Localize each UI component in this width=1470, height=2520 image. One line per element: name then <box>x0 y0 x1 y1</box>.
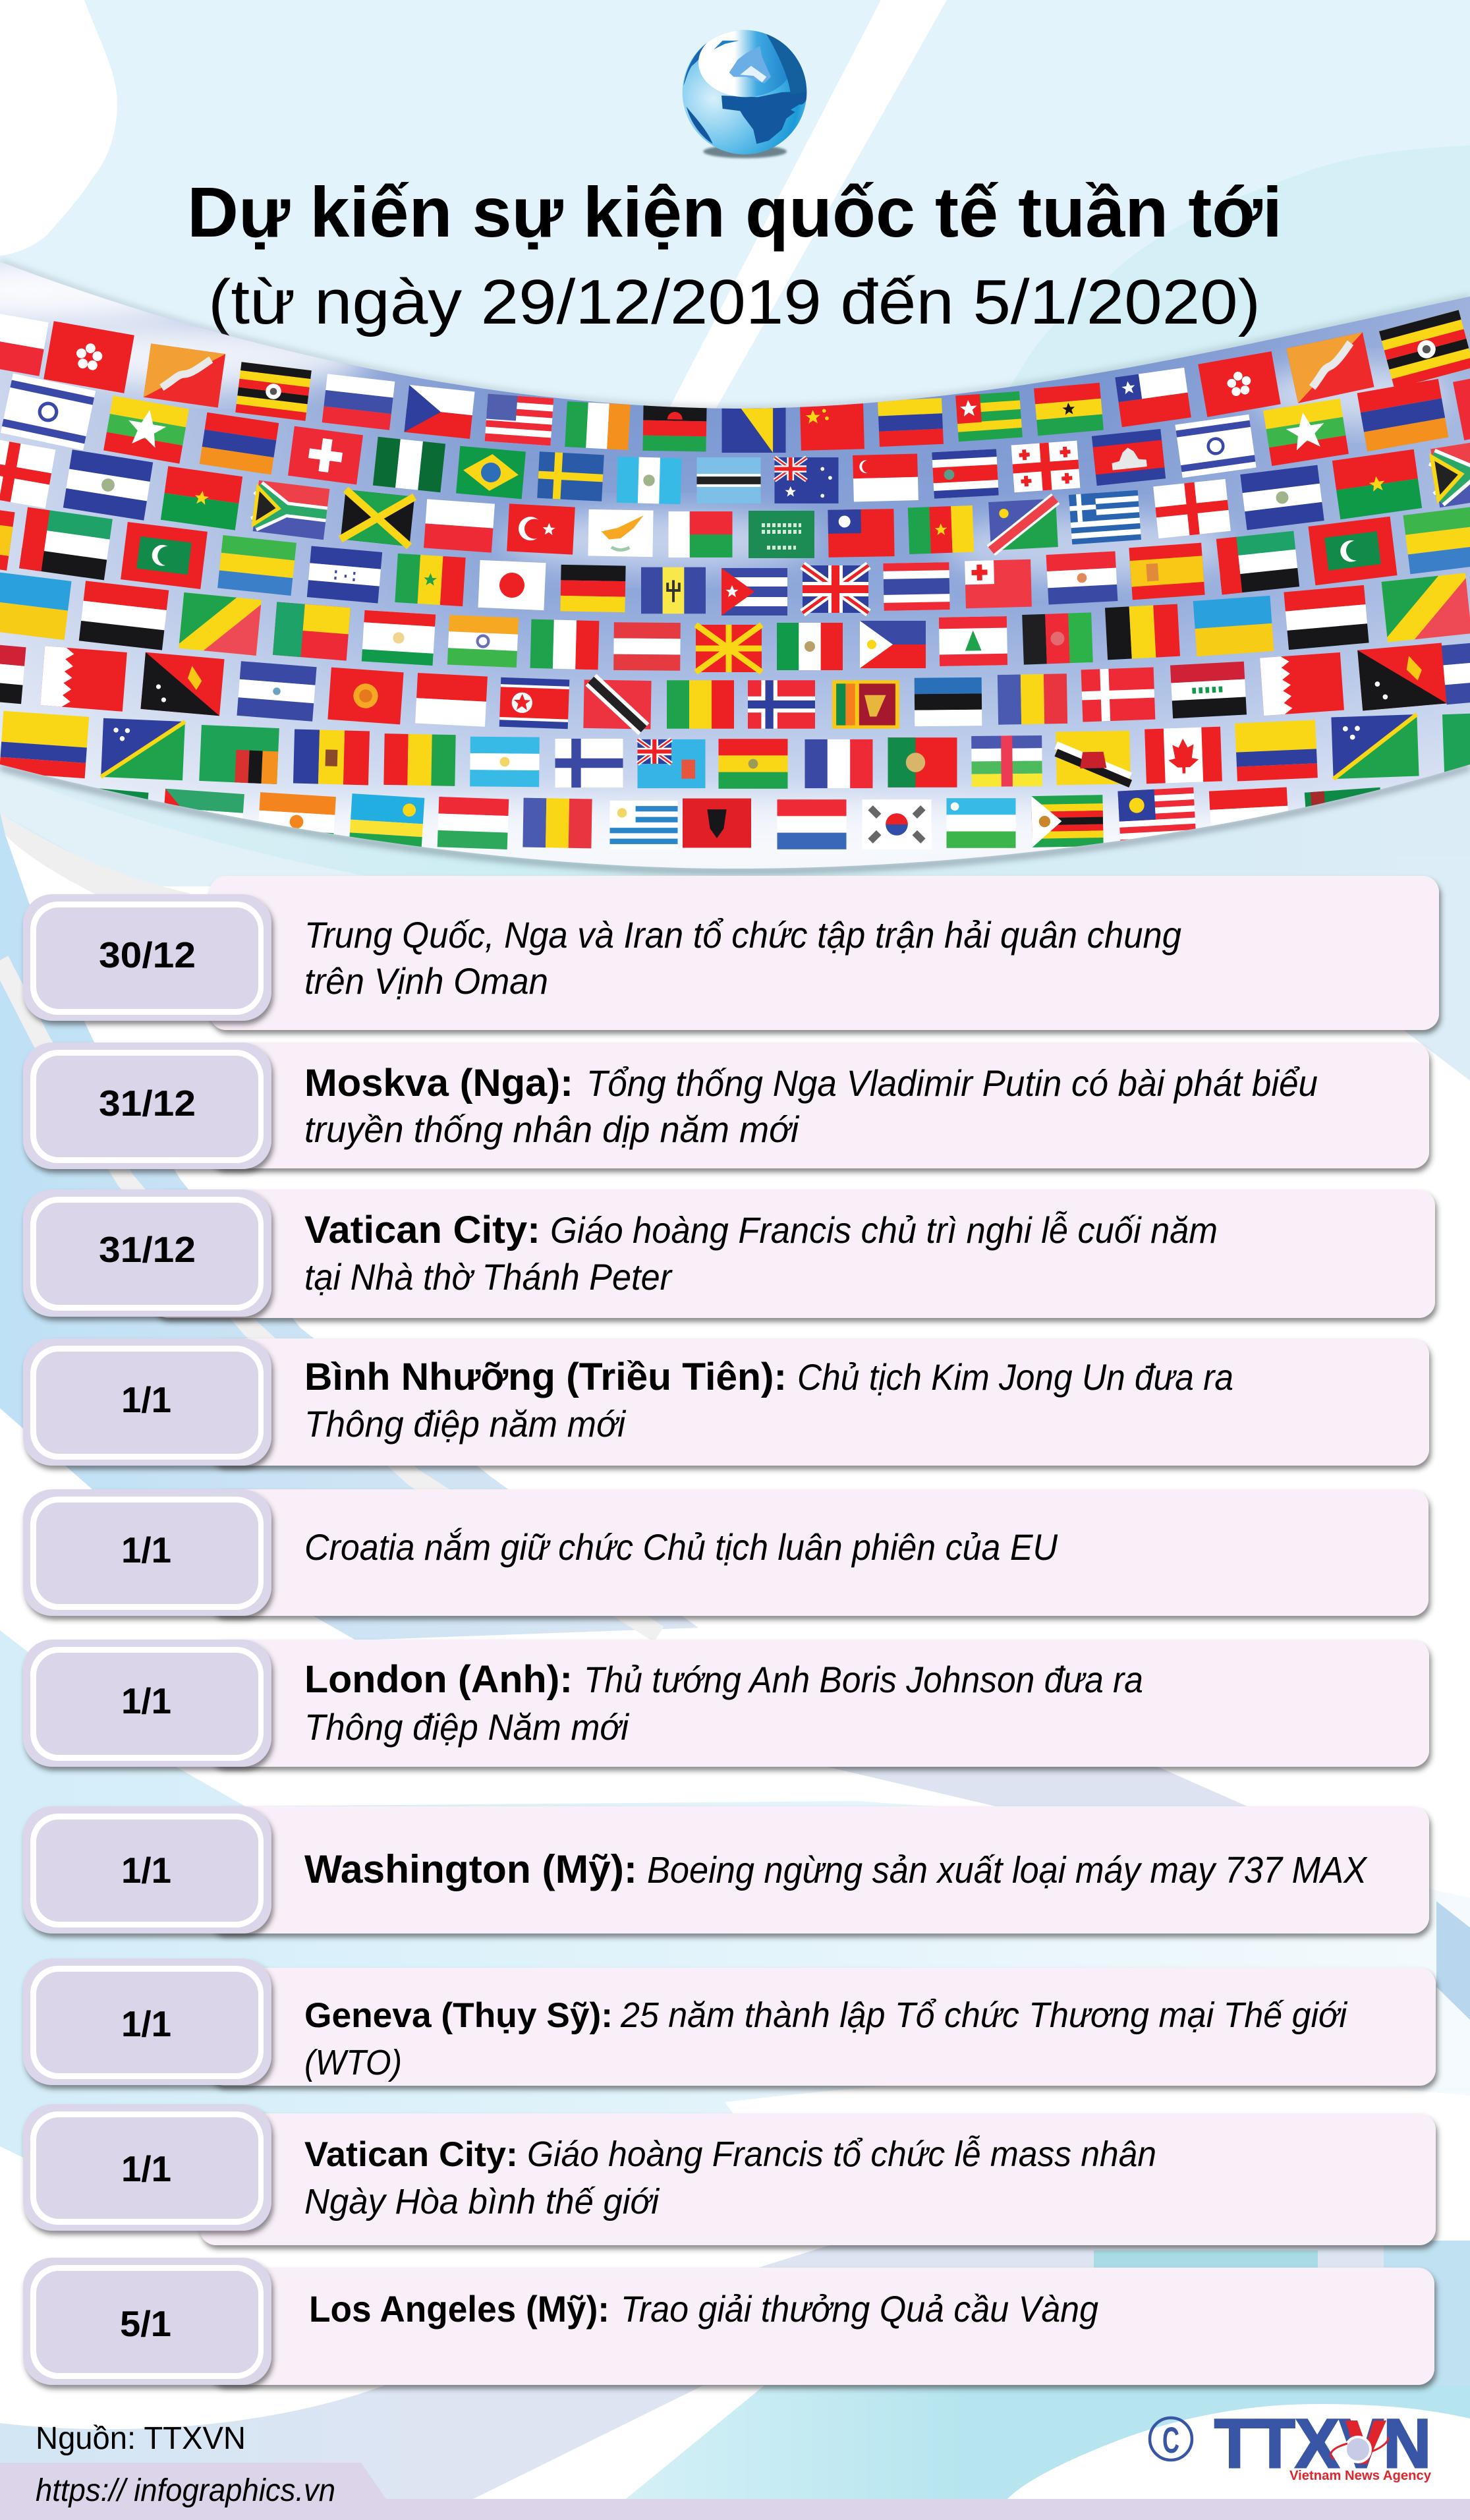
event text: 25 năm thành lập Tổ chức Thương mại Thế giới <box>620 1995 1348 2035</box>
date pill: 31/12 <box>99 1083 196 1124</box>
flag row 8 <box>67 786 1384 851</box>
panel: event 10 <box>23 2258 1434 2385</box>
event text <box>304 1356 1233 1445</box>
event text: Washington (Mỹ): <box>304 1847 637 1891</box>
date pill: 30/12 <box>99 934 196 975</box>
event text: trên Vịnh Oman <box>304 960 548 1002</box>
panel: event 3 <box>23 1189 1435 1318</box>
date pill: 1/1 <box>121 2003 171 2044</box>
date pill: 1/1 <box>121 1680 171 1721</box>
title: Dự kiến sự kiện quốc tế tuần tới <box>187 172 1282 252</box>
date pill: 31/12 <box>99 1229 196 1270</box>
date pill: 1/1 <box>121 2148 171 2189</box>
event text: Chủ tịch Kim Jong Un đưa ra <box>797 1356 1233 1398</box>
date pill: 5/1 <box>120 2303 171 2344</box>
event text: Ngày Hòa bình thế giới <box>304 2182 660 2221</box>
source text: Nguồn: TTXVN <box>36 2421 246 2456</box>
event text: Thông điệp năm mới <box>304 1403 626 1445</box>
event text: Thông điệp Năm mới <box>304 1706 629 1748</box>
event text <box>304 1062 1318 1150</box>
date pill <box>23 1338 271 1466</box>
subtitle: date range: (từ ngày 29/12/2019 đến 5/1/2020) <box>208 267 1260 337</box>
event text: tại Nhà thờ Thánh Peter <box>304 1256 673 1298</box>
event text: Vatican City: <box>304 1209 540 1251</box>
event text: Thủ tướng Anh Boris Johnson đưa ra <box>584 1659 1143 1700</box>
event text: Bình Nhưỡng (Triều Tiên): <box>304 1356 787 1398</box>
event text <box>304 1209 1218 1298</box>
event text: London (Anh): <box>304 1658 573 1701</box>
icon: globe <box>683 28 808 158</box>
event text: Tổng thống Nga Vladimir Putin có bài phát biểu <box>586 1062 1318 1104</box>
date pill <box>23 2258 271 2385</box>
panel: event 2 <box>23 1043 1429 1169</box>
logo: TTXVN: TTXVN <box>1214 2405 1431 2482</box>
flag row 6 <box>0 639 1470 730</box>
event text: Boeing ngừng sản xuất loại máy may 737 MAX <box>647 1849 1368 1891</box>
date pill: 1/1 <box>121 1850 171 1891</box>
panel: event 5 <box>23 1489 1428 1616</box>
event text: Trao giải thưởng Quả cầu Vàng <box>621 2288 1098 2330</box>
panel: event 6 <box>23 1640 1429 1767</box>
event text: truyền thống nhân dịp năm mới <box>304 1108 800 1150</box>
panel: event 4 <box>23 1338 1429 1466</box>
event text: Trung Quốc, Nga và Iran tổ chức tập trận hải quân chung <box>304 914 1181 956</box>
website url: https:// infographics.vn <box>36 2473 335 2508</box>
date pill <box>23 1189 271 1317</box>
event text: Giáo hoàng Francis tổ chức lễ mass nhân <box>527 2134 1156 2174</box>
footer lavender bar <box>0 2463 1470 2520</box>
flag row 1 <box>0 309 1470 453</box>
date pill: 1/1 <box>121 1379 171 1420</box>
flag row 3 <box>0 436 1470 558</box>
panel: event 1 <box>23 876 1439 1030</box>
flag banner <box>0 257 1470 873</box>
event text: Vatican City: <box>304 2135 518 2174</box>
date pill <box>23 1043 271 1169</box>
flag row 2 <box>1 366 1470 504</box>
date pill <box>23 2104 271 2231</box>
event text: Moskva (Nga): <box>304 1062 573 1104</box>
event text: Los Angeles (Mỹ): <box>309 2288 609 2330</box>
background: top sky panel <box>0 0 1470 870</box>
date pill <box>23 1806 271 1933</box>
event text <box>304 1995 1348 2082</box>
date pill <box>23 1489 271 1616</box>
date pill: 1/1 <box>121 1530 171 1570</box>
logo: TTXVN: C <box>1162 2419 1179 2461</box>
event text <box>304 914 1181 1002</box>
event text: Giáo hoàng Francis chủ trì nghi lễ cuối năm <box>550 1209 1218 1251</box>
panel: event 7 <box>23 1806 1429 1933</box>
event text <box>304 2134 1156 2221</box>
event text <box>304 1658 1143 1748</box>
flag row 7 <box>0 711 1470 789</box>
date pill <box>23 1640 271 1767</box>
date pill <box>23 894 271 1021</box>
event text: (WTO) <box>304 2043 402 2082</box>
panel: event 9 <box>23 2104 1436 2245</box>
flag row 4 <box>0 501 1470 616</box>
flag row 5 <box>0 571 1470 672</box>
event text <box>309 2288 1098 2330</box>
event text <box>304 1847 1368 1891</box>
logo: TTXVN: Vietnam News Agency <box>1289 2469 1432 2483</box>
date pill <box>23 1959 271 2085</box>
event text: Geneva (Thụy Sỹ): <box>304 1996 613 2035</box>
panel: event 8 <box>23 1959 1436 2086</box>
background: lower decorative shapes <box>0 758 1470 2504</box>
event text: Croatia nắm giữ chức Chủ tịch luân phiên của EU <box>304 1526 1058 1568</box>
